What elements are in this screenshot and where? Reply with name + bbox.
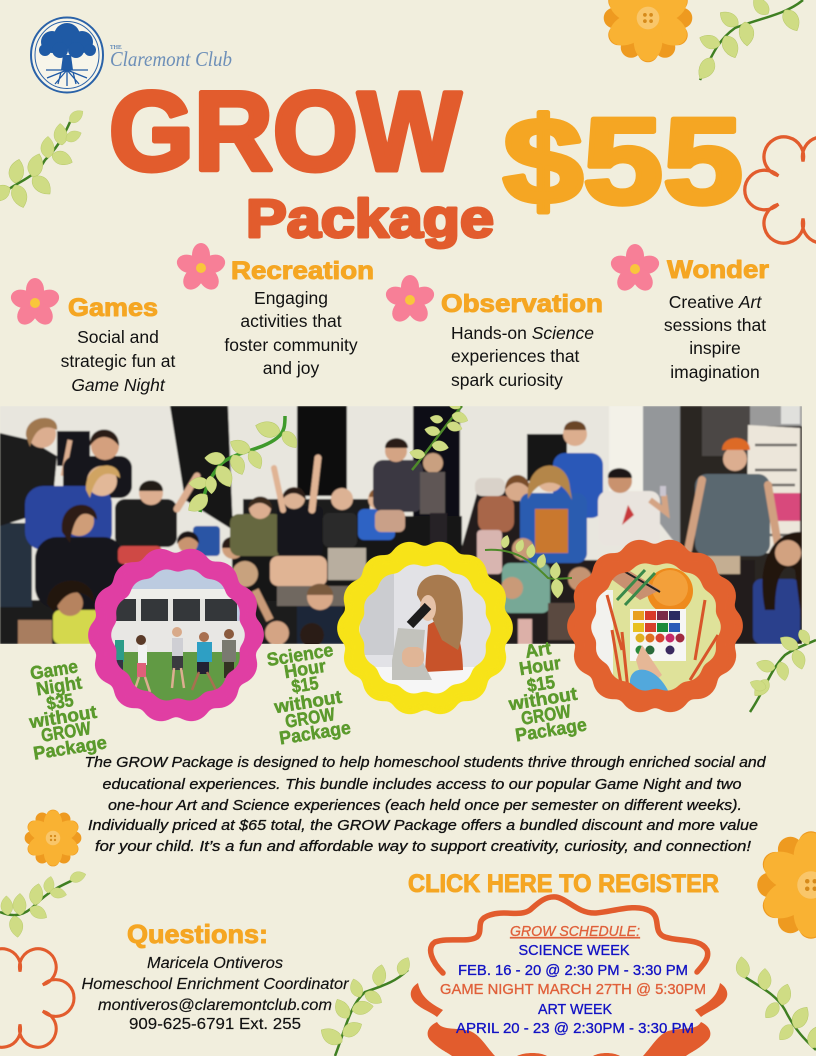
description paragraph: educational experiences. This bundle includes access to our popular Game Night and two (102, 776, 742, 793)
schedule panel: GAME NIGHT MARCH 27TH @ 5:30PM (440, 982, 706, 998)
icon: top orange flower (603, 0, 693, 61)
group photo (0, 394, 802, 647)
icon: pink flower (383, 275, 437, 326)
column: Observation (383, 275, 603, 390)
icon: pink flower (8, 278, 62, 329)
column: Recreation: Recreation (231, 257, 374, 285)
title: GROW: GROW (109, 69, 461, 194)
label: Game Night price: Game (29, 655, 79, 684)
schedule panel: SCIENCE WEEK (518, 943, 630, 959)
label: Art Hour price: Package (514, 714, 588, 746)
column: Observation: Observation (441, 290, 603, 318)
icon: small orange flower (24, 810, 82, 866)
icon: lower left outlined flower (0, 949, 74, 1047)
vine over photo right (485, 534, 572, 599)
label: Art Hour price: Hour (518, 652, 562, 679)
column: Games: strategic fun at (61, 351, 176, 371)
label: Art Hour price (506, 637, 588, 746)
logo: The Claremont Club (31, 18, 232, 92)
description paragraph: Individually priced at $65 total, the GROW Package offers a bundled discount and more value (88, 817, 758, 834)
logo: The Claremont Club: Claremont Club (110, 47, 232, 71)
label: Game Night price: $35 (45, 689, 75, 714)
icon: mid right vine (748, 627, 816, 712)
schedule panel: GROW SCHEDULE: (510, 924, 640, 940)
label: Science Hour price: $15 (290, 672, 320, 697)
vine over photo center (409, 406, 468, 471)
label: Science Hour price: Package (278, 717, 352, 749)
column: Recreation: and joy (263, 358, 319, 378)
label: Science Hour price (265, 639, 352, 749)
label: Science Hour price: without (272, 686, 343, 717)
people: kids on couch (115, 499, 177, 547)
label: Science Hour price: Hour (283, 655, 327, 682)
description paragraph: for your child. It’s a fun and affordable way to support creativity, curiosity, and connection! (95, 838, 752, 855)
icon: bottom right vine (734, 956, 816, 1050)
heading: Questions: Questions: (127, 919, 268, 949)
column: Games: Social and (77, 327, 159, 347)
vine over photo left (188, 416, 297, 512)
column: Wonder (608, 244, 769, 382)
label: Science Hour price: Science (265, 639, 335, 670)
icon: bottom center vine (317, 955, 413, 1056)
column: Recreation: foster community (224, 335, 358, 355)
icon: left vine (0, 107, 86, 210)
title: Package: Package (246, 189, 494, 249)
description paragraph: one-hour Art and Science experiences (each held once per semester on different weeks). (108, 797, 742, 814)
column: Observation: experiences that (451, 346, 580, 366)
column: Wonder: imagination (670, 362, 760, 382)
contact details: Homeschool Enrichment Coordinator (82, 976, 349, 993)
wavy frame (431, 897, 708, 973)
icon: right orange flower (757, 832, 816, 938)
label: Game Night price: GROW (40, 717, 93, 746)
label: Game Night price: Night (35, 672, 83, 699)
schedule panel: ART WEEK (538, 1002, 612, 1018)
column: Wonder: Creative Art (669, 292, 762, 312)
schedule panel: FEB. 16 - 20 @ 2:30 PM - 3:30 PM (458, 963, 688, 979)
column: Recreation: activities that (240, 311, 342, 331)
contact details (82, 955, 349, 1033)
front kids center (232, 561, 258, 587)
badge: science photo (350, 550, 500, 710)
column: Wonder: Wonder (667, 256, 769, 284)
label: Art Hour price: without (506, 683, 579, 714)
label: Art Hour price: Art (523, 637, 552, 662)
column: Observation: spark curiosity (451, 370, 563, 390)
label: Art Hour price: GROW (520, 700, 573, 729)
column: Wonder: sessions that (664, 315, 766, 335)
column: Games: Games (68, 294, 158, 322)
sign (747, 425, 800, 553)
schedule panel: APRIL 20 - 23 @ 2:30PM - 3:30 PM (456, 1021, 694, 1037)
label: Game Night price (27, 655, 108, 764)
call to action: click here to register: CLICK HERE TO REGISTER (408, 870, 719, 898)
icon: pink flower (174, 243, 228, 294)
badge: art photo (585, 555, 730, 700)
contact details: montiveros@claremontclub.com (98, 997, 332, 1014)
icon: outlined flower right (745, 137, 816, 243)
label: Game Night price: without (27, 701, 98, 732)
icon: lower left vine (0, 869, 87, 938)
column: Recreation (174, 243, 374, 378)
column: Wonder: inspire (689, 338, 741, 358)
icon: top right vine (694, 0, 804, 83)
column: Recreation: Engaging (254, 288, 328, 308)
people: staff at left (0, 523, 32, 607)
price: $55: $55 (503, 93, 743, 229)
column: Games: Game Night (71, 375, 166, 395)
logo: The Claremont Club: THE (110, 45, 122, 51)
description paragraph: The GROW Package is designed to help homeschool students thrive through enriched social and (84, 754, 766, 771)
dark floor and couch (0, 600, 802, 644)
schedule panel (411, 897, 727, 1056)
badge: game night photo (100, 555, 260, 715)
column: Games (8, 278, 176, 395)
contact details: 909-625-6791 Ext. 255 (129, 1016, 301, 1033)
contact details: Maricela Ontiveros (147, 955, 283, 972)
column: Observation: Hands-on Science (451, 323, 594, 343)
icon: pink flower (608, 244, 662, 295)
label: Art Hour price: $15 (525, 671, 556, 696)
people: right group (553, 453, 603, 518)
description paragraph (84, 754, 766, 855)
label: Science Hour price: GROW (284, 703, 337, 732)
label: Game Night price: Package (32, 731, 108, 764)
